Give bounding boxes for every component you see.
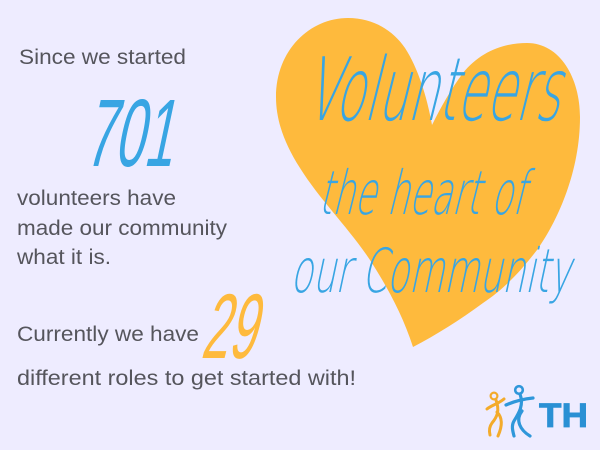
heading line: Volunteers: Volunteers [300, 40, 579, 142]
text: different roles: different roles to get started with! [17, 367, 356, 390]
text: volunteers have made our community what it is: volunteers have [17, 187, 176, 210]
icon: blue figure [506, 386, 533, 436]
heading line: our Community: our Community [287, 237, 582, 307]
heading line: the heart of: the heart of [314, 159, 538, 229]
number: 29: 29 [195, 274, 275, 378]
heart shape [276, 18, 580, 347]
heading: Volunteers the heart of our Community [287, 40, 582, 307]
text: volunteers have made our community what it is: what it is. [16, 246, 111, 269]
text: currently we have: Currently we have [17, 323, 199, 346]
logo text: TH: TH [539, 397, 588, 435]
text: volunteers have made our community what it is [16, 187, 228, 269]
icon: orange figure [487, 393, 504, 436]
text: volunteers have made our community what it is: made our community [17, 217, 228, 240]
number: 701: 701 [80, 80, 190, 187]
text: since we started: Since we started [19, 46, 186, 69]
logo: TH [487, 386, 588, 436]
